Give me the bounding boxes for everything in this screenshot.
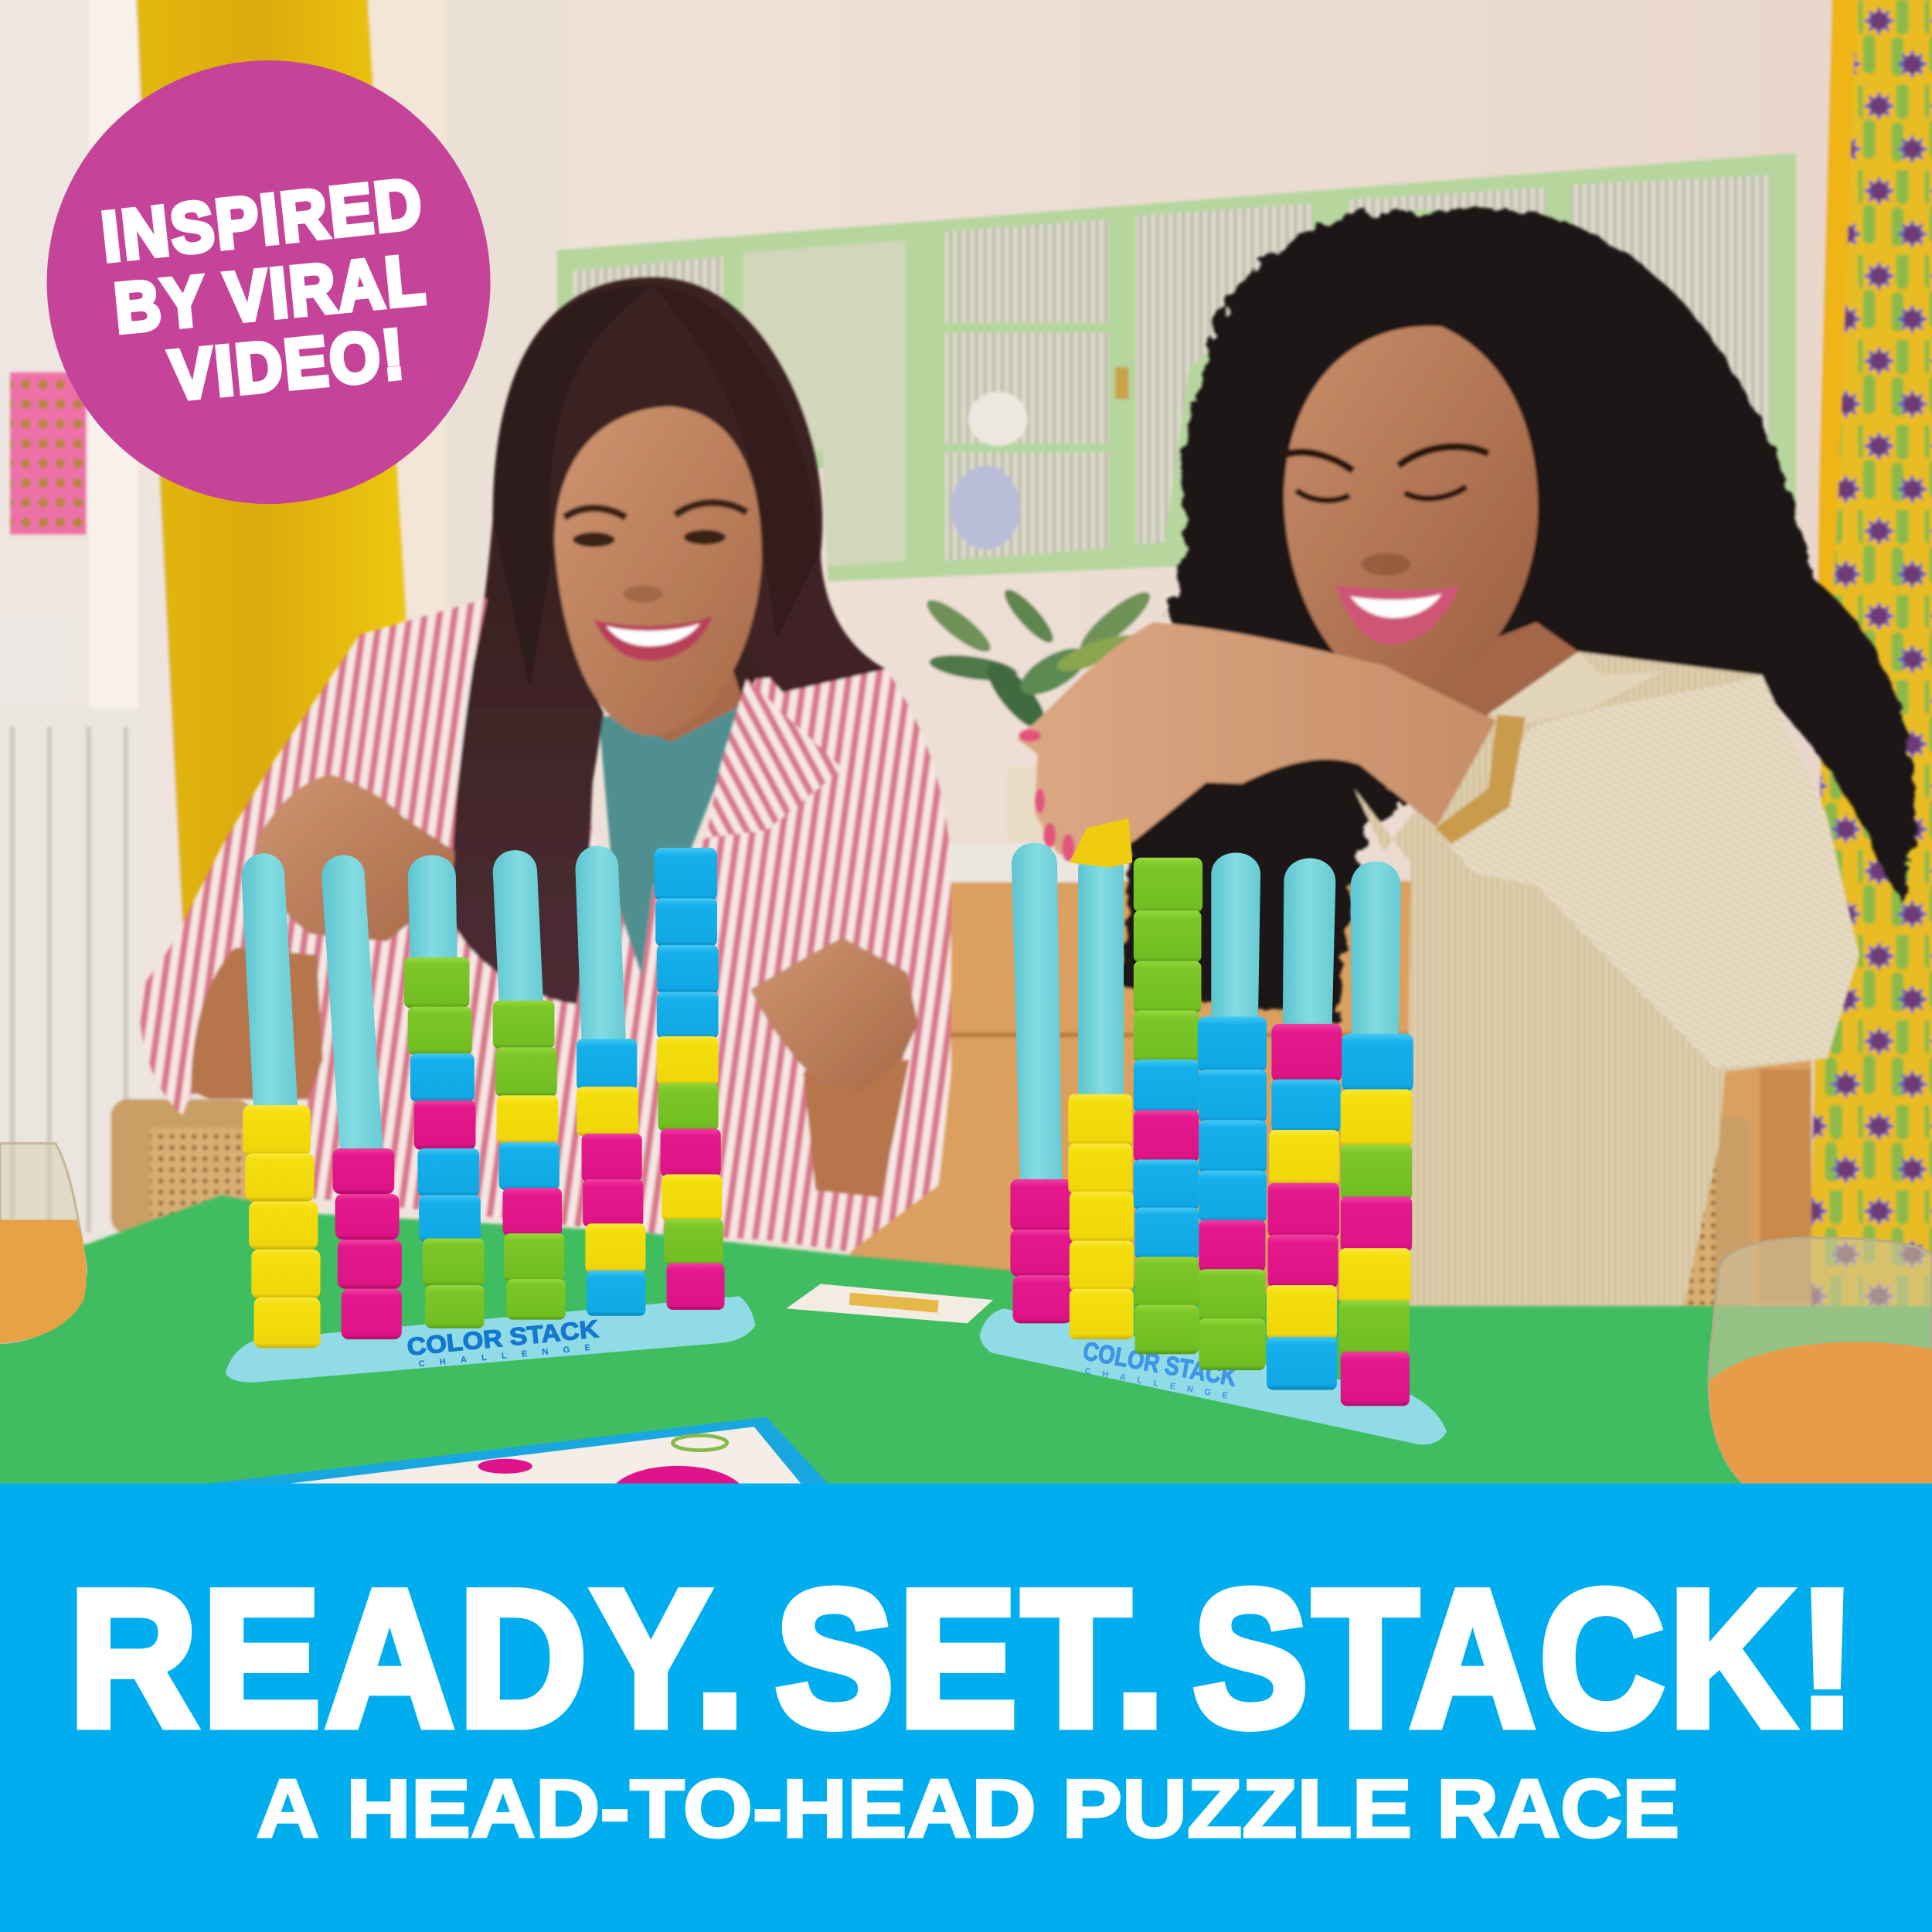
left game board (226, 846, 755, 1383)
brows and eyes (1281, 447, 1488, 500)
subheadline: HEAD-TO-HEAD (346, 1762, 1036, 1855)
curtain (135, 0, 406, 924)
wall cabinet (557, 153, 1797, 582)
sweater sleeve (1447, 675, 1859, 1068)
left forearm (191, 947, 323, 1099)
shirt right side (636, 669, 951, 1252)
board base (226, 1296, 755, 1383)
peg 4 (1198, 852, 1267, 1370)
peg 1 (241, 853, 321, 1348)
face (1284, 326, 1538, 697)
pink wall poster (10, 372, 87, 535)
badge line 2: BY VIRAL (111, 240, 430, 348)
smile (594, 616, 713, 661)
peg 2 (321, 855, 402, 1339)
collar (1490, 651, 1663, 727)
pink nails (1019, 730, 1074, 861)
teal tee (599, 703, 744, 1022)
face (554, 406, 762, 736)
neck (610, 653, 744, 742)
right forearm (804, 1060, 910, 1198)
subheadline (257, 1762, 1679, 1855)
bracelet (1435, 715, 1526, 844)
badge line 1: INSPIRED (98, 164, 427, 277)
neck (1386, 622, 1578, 813)
chairs (111, 1099, 1751, 1318)
subheadline: A (257, 1762, 319, 1855)
plant (920, 583, 1157, 843)
subheadline: RACE (1437, 1762, 1679, 1855)
shirt left side (140, 597, 655, 1235)
hair right lock (744, 543, 886, 692)
right glass of juice (1709, 1238, 1932, 1484)
badge: inspired by viral video (47, 60, 491, 504)
headline: STACK! (1192, 1550, 1861, 1767)
peg 6 (1339, 861, 1413, 1406)
board logo: COLOR STACK (406, 1315, 600, 1361)
board logo: CHALLENGE (418, 1343, 590, 1369)
badge line 3: VIDEO! (166, 315, 410, 415)
curly hair (1121, 209, 1915, 1022)
brows and eyes (564, 502, 747, 547)
peg 4 (493, 850, 566, 1320)
instruction card (786, 1284, 993, 1323)
peg 5 (1267, 858, 1342, 1389)
peg 3 (1134, 858, 1202, 1354)
yellow tile trim (1816, 0, 1857, 740)
nose shadow (624, 585, 663, 603)
peg 3 (404, 855, 485, 1328)
light switch (2, 617, 66, 701)
left hand (257, 775, 454, 941)
board base (980, 1308, 1447, 1444)
radiator (0, 709, 141, 1238)
peg 5 (576, 846, 645, 1316)
person: right woman (1018, 209, 1915, 1316)
hair back (473, 277, 886, 696)
nose shadow (1362, 553, 1411, 576)
headline (69, 1550, 1861, 1767)
blue banner (0, 1484, 1932, 1932)
right game board (980, 818, 1447, 1444)
lower cabinets (850, 843, 1811, 1312)
subheadline: PUZZLE (1062, 1762, 1412, 1855)
photo scene background: room (0, 0, 1932, 1497)
headline: READY. (69, 1550, 749, 1767)
person: left woman (140, 277, 951, 1252)
puzzle board on table (209, 1417, 828, 1484)
room base wall (0, 0, 1932, 1503)
collar (706, 679, 843, 838)
smile (1335, 585, 1460, 645)
hand and forearm (1018, 622, 1496, 865)
peg 6 (655, 848, 725, 1310)
peg 1 (1010, 843, 1072, 1323)
left glass of juice (0, 1144, 87, 1343)
board logo: CHALLENGE (1084, 1366, 1229, 1401)
zellige tile wall (1809, 0, 1932, 1318)
front hair parts (493, 286, 653, 690)
peg 2 with lifted ring (1068, 818, 1134, 1339)
board logo: COLOR STACK (1080, 1337, 1239, 1392)
green table (0, 1196, 1932, 1497)
sweater body (1354, 651, 1859, 1316)
right hand (750, 937, 918, 1090)
headline: SET. (775, 1550, 1169, 1767)
hair front lock (452, 543, 604, 1004)
